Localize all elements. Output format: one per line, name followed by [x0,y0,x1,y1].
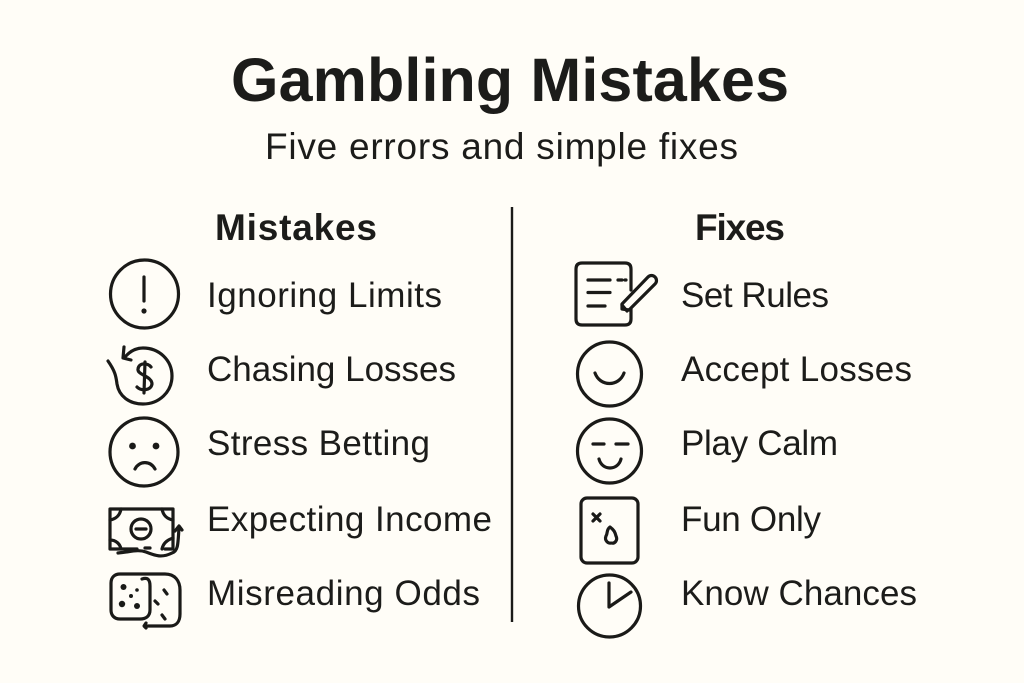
label: expecting income: Expecting Income [207,500,492,539]
icon: dollar with circular arrow [108,347,172,404]
icon: banknote with arrow [110,509,182,556]
panel: mistakes [108,207,492,628]
title: Gambling Mistakes [231,46,789,114]
icon: calm face [578,419,642,483]
icon: dice [111,574,180,628]
label: fun only: Fun Only [681,500,822,539]
icon: sad face [110,418,178,486]
icon: notepad and pen [576,263,656,325]
label: know chances: Know Chances [681,574,917,613]
label: play calm: Play Calm [681,424,838,463]
label: accept losses: Accept Losses [681,350,912,389]
label: chasing losses: Chasing Losses [207,350,456,389]
icon: smile face [578,342,642,406]
heading: mistakes: Mistakes [215,207,377,248]
subtitle: Five errors and simple fixes [265,126,738,167]
label: stress betting: Stress Betting [207,424,430,463]
label: misreading odds: Misreading Odds [207,574,480,613]
icon: clock [578,575,640,637]
label: set rules: Set Rules [681,276,829,315]
icon: exclamation in circle [110,260,178,328]
label: ignoring limits: Ignoring Limits [207,276,442,315]
heading: fixes: Fixes [695,207,785,248]
panel: fixes [576,207,917,637]
icon: playing card [581,498,638,563]
